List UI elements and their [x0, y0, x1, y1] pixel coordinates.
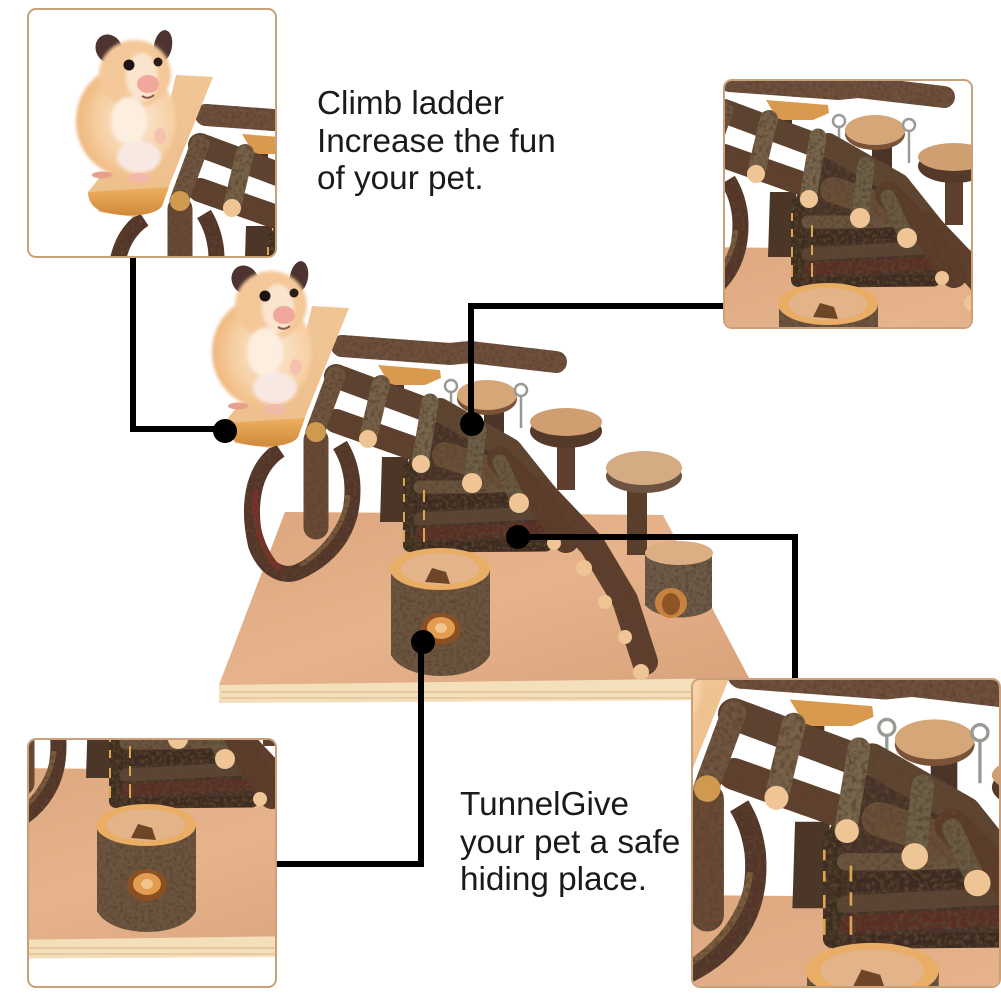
- small tunnel stump: [645, 541, 713, 618]
- product scene: wooden playground: [212, 260, 749, 703]
- text: tunnel caption: your pet a safe: [460, 824, 680, 861]
- ladder rails and rungs: [315, 375, 645, 662]
- main tunnel: [390, 548, 490, 676]
- inset: log stack close-up: [691, 678, 1001, 988]
- support post: [304, 440, 328, 527]
- top log: [342, 346, 556, 362]
- hanging hooks: [445, 380, 527, 428]
- text: tunnel caption: hiding place.: [460, 861, 647, 898]
- inset: tunnel close-up: [27, 738, 277, 988]
- connector: ladder inset to ladder: [460, 306, 724, 436]
- inset: ladder close-up: [723, 79, 973, 329]
- hamster face: [228, 288, 302, 414]
- connector: hamster inset to perch: [133, 258, 237, 443]
- hamster: [212, 260, 312, 414]
- back platform: [378, 365, 441, 400]
- base board: [219, 512, 749, 703]
- wooden perch: [224, 306, 349, 448]
- inset: hamster on climb ladder: [27, 8, 277, 258]
- text: climb ladder caption: of your pet.: [317, 160, 484, 197]
- text: climb ladder caption: Increase the fun: [317, 123, 556, 160]
- round platform 4: [606, 451, 682, 555]
- stack lashing flecks: [404, 478, 424, 542]
- rung cut ends: [306, 422, 649, 680]
- text: tunnel caption: TunnelGive: [460, 786, 629, 823]
- connector: tunnel to tunnel inset: [277, 630, 435, 864]
- woven ring: [252, 445, 352, 574]
- round platform 2: [457, 380, 517, 435]
- hamster ears: [226, 260, 311, 299]
- horizontal log stack: [404, 420, 566, 553]
- round platform 3: [530, 408, 602, 490]
- connector: log stack to large inset: [506, 525, 795, 679]
- back panel: [380, 457, 408, 522]
- text: climb ladder caption: Climb ladder: [317, 85, 504, 122]
